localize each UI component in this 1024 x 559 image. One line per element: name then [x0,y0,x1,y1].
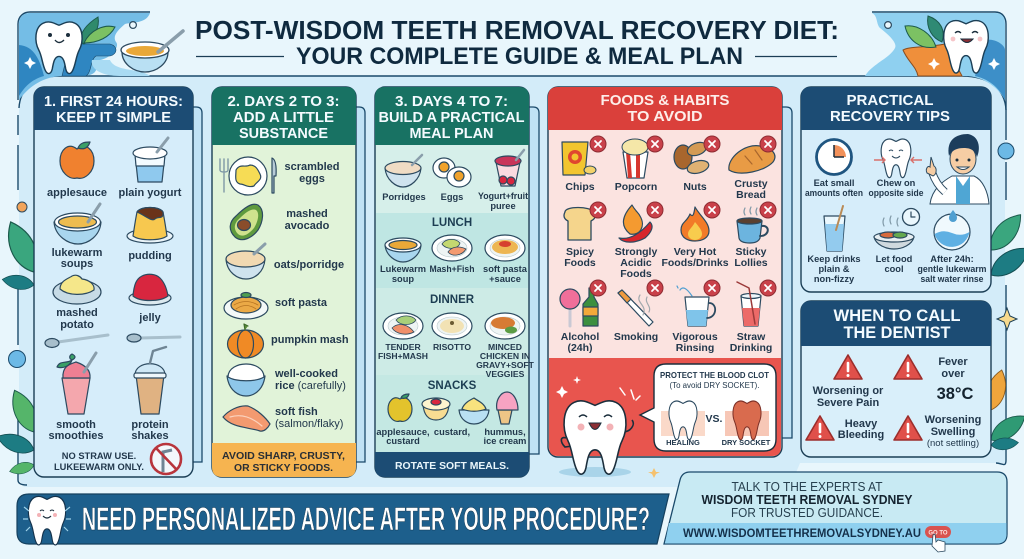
icon: minced chicken [485,313,525,339]
icon: jelly [129,274,171,305]
icon: banner tooth [23,496,71,545]
label: chew on: Chew on [877,178,916,188]
panel 1: first 24 hours [34,87,193,477]
temperature value: 38°C [937,385,974,403]
icon: pasta with sauce [485,235,525,261]
icon: plain yogurt [133,138,168,182]
icon: hot mug [737,202,776,243]
label: porridges: Porridges [382,192,426,202]
label: non-fizzy: non-fizzy [814,274,855,284]
dinner band [376,288,528,375]
label: bleeding: Bleeding [838,429,884,441]
label: soft pasta: soft pasta [483,264,528,274]
top left decoration [19,13,183,100]
icon: mash and fish [432,235,472,261]
label: spicy foods: Spicy [566,246,594,258]
label: not settling: (not settling) [927,438,979,449]
icon: lukewarm soup [385,238,421,262]
label: lollies: Lollies [734,257,768,269]
label: fish+mash: FISH+MASH [378,351,428,361]
panel 3: days 4 to 7 [375,87,535,477]
icon: crusty bread [729,136,776,173]
label: crusty: Crusty [734,178,768,190]
panel 4 header: TO AVOID [628,108,703,125]
label: let food: Let food [876,254,913,264]
icon: yogurt fruit [495,150,524,186]
left side leaves [0,202,45,477]
panel 6 header [801,301,991,346]
label: protein shakes: protein [131,419,169,431]
contact text line 2: WISDOM TEETH REMOVAL SYDNEY [702,493,913,507]
mascot tooth [556,376,660,478]
panel 5: practical recovery tips [801,87,991,292]
label: nuts: Nuts [683,181,707,193]
panel 2 footer: OR STICKY FOODS. [234,462,333,474]
icon: glass of water [824,206,845,251]
icon: hummus bowl [459,398,489,424]
icon: protein shake [134,347,166,414]
label: heavy: Heavy [845,418,878,430]
label: rice carefully: rice (carefully) [275,380,346,392]
label: potato: potato [60,319,94,331]
icon: lollipop and bottle [560,280,606,326]
panel 4 header: FOODS & HABITS [600,92,730,109]
panel 3 header: MEAL PLAN [410,125,494,142]
icon: salmon [223,406,270,431]
icon: cigarette [618,280,663,326]
label: lukewarm soups: lukewarm [52,247,103,259]
heading: lunch: LUNCH [432,217,472,229]
label: salmon flaky: (salmon/flaky) [275,418,343,430]
icon: warning pain [834,355,862,379]
heading: dinner: DINNER [430,294,475,306]
label: over: over [941,368,965,380]
icon: pumpkin [228,324,264,358]
panel 5 header [801,87,991,130]
icon: tender fish mash [383,313,423,339]
label: foods: Foods [620,268,652,280]
icon: popcorn [622,136,663,178]
icon: toast [564,202,606,240]
label: cool: cool [884,264,904,274]
icon: avocado [230,204,263,240]
panel 3 footer: ROTATE SOFT MEALS. [395,460,509,472]
icon: risotto [432,313,472,339]
icon: oats bowl [226,244,265,279]
label: soup: soup [392,274,414,284]
icon: porridge [385,155,422,187]
label: avocado: avocado [285,220,330,232]
contact text line 3: FOR TRUSTED GUIDANCE. [731,506,883,520]
panel 6: when to call the dentist [801,301,991,457]
banner heading: NEED PERSONALIZED ADVICE AFTER YOUR PROCEDURE? [82,501,650,537]
icon: doctor [926,134,989,204]
label: worsening: Worsening [925,414,981,426]
label: applesauce: applesauce [47,187,107,199]
panel 1 header: KEEP IT SIMPLE [56,109,171,126]
label: dry socket: DRY SOCKET [722,438,771,447]
speech bubble: protect the blood clot: PROTECT THE BLOOD CLOT [660,370,770,380]
icon: chips [562,136,606,175]
heading: snacks: SNACKS [428,380,477,392]
label: pumpkin mash: pumpkin mash [271,334,349,346]
label: fever: Fever [938,356,968,368]
label: vigorous: Vigorous [672,331,718,343]
label: pudding: pudding [128,250,172,262]
title: POST-WISDOM TEETH REMOVAL RECOVERY DIET: [195,15,839,45]
label: smooth smoothies: smooth [56,419,96,431]
lunch band [376,213,528,288]
icon: apple [388,394,412,421]
label: shakes: shakes [131,430,169,442]
icon: spoons [45,334,180,348]
label: eggs: eggs [299,173,325,185]
label: healing: HEALING [666,438,700,447]
panel 2 header: SUBSTANCE [239,125,328,142]
panel 1 header: 1. FIRST 24 HOURS: [44,93,183,110]
title [195,15,839,70]
label: veggies: VEGGIES [486,369,525,379]
panel 2 header: 2. DAYS 2 TO 3: [228,93,340,110]
label: rinsing: Rinsing [676,342,714,354]
panel 1 header [34,87,193,130]
panel 5 header: PRACTICAL [846,92,934,109]
icon: scrambled eggs [220,157,276,195]
icon: smoothie [57,353,96,414]
website address: WWW.WISDOMTEETHREMOVALSYDNEY.AU [683,526,921,540]
panel 2 footer: AVOID SHARP, CRUSTY, [222,450,345,462]
contact card [664,472,1007,552]
label: soft fish: soft fish [275,406,318,418]
label: keep drinks: Keep drinks [807,254,861,264]
panel 3 header: 3. DAYS 4 TO 7: [395,93,508,110]
icon: dry socket [725,401,769,440]
icon: soft pasta [224,292,268,319]
label: +sauce: +sauce [489,274,521,284]
icon: vigorous rinsing glass [677,280,720,326]
icon: nuts [674,136,720,176]
label: amounts often: amounts often [805,188,863,198]
label: smoothies: smoothies [48,430,104,442]
label: straw: Straw [737,331,766,343]
label: very hot: Very Hot [674,246,717,258]
label: acidic: Acidic [620,257,652,269]
panel 3 footer [375,452,529,477]
panel 2 footer [212,443,356,477]
label: severe pain: Severe Pain [817,397,879,409]
label: ice cream: ice cream [484,436,526,446]
icon: custard cup [422,398,450,420]
icon: eggs [433,158,471,187]
go to button [925,526,951,552]
label: gravy+soft: GRAVY+SOFT [476,360,535,370]
label: lukewarm soup: Lukewarm [380,264,426,274]
panel 4 header [548,87,782,130]
label: oats/porridge: oats/porridge [274,259,344,271]
label: swelling: Swelling [931,426,975,438]
label: smoking: Smoking [614,331,658,343]
label: strongly: Strongly [615,246,657,258]
label: foods/drinks: Foods/Drinks [661,257,729,269]
panel 2 header [212,87,356,145]
icon: warning bleeding [806,416,834,440]
label: yogurt+fruit: Yogurt+fruit [478,191,528,201]
panel 3 header [375,87,529,145]
panel 2 header: ADD A LITTLE [233,109,334,126]
label: applesauce: applesauce, [376,427,430,437]
label: plain: plain & [818,264,850,274]
icon: chew on opposite side [874,139,922,178]
panel 6 header: THE DENTIST [844,323,951,342]
label: (24h): (24h) [567,342,593,354]
icon: mashed potato [53,275,101,304]
contact text line 1: TALK TO THE EXPERTS AT [732,480,883,494]
label: foods: Foods [564,257,596,269]
label: eat small: Eat small [814,178,854,188]
icon: warning swelling [894,416,922,440]
label: well-cooked: well-cooked [274,368,338,380]
panel 3 header: BUILD A PRACTICAL [378,109,524,126]
go to button: GO TO [928,530,948,536]
panel 5 header: RECOVERY TIPS [830,108,950,125]
bottom banner [17,494,669,545]
label: minced: MINCED [488,342,522,352]
label: salt water rinse: salt water rinse [920,274,984,284]
panel 2: days 2 to 3 [212,87,356,477]
icon: flame [681,202,720,241]
label: hummus: hummus, [484,427,526,437]
label: puree: puree [490,201,516,211]
label: popcorn: Popcorn [615,181,657,193]
lower callout band [549,358,781,456]
icon: apple [60,142,94,178]
icon: clock [816,140,852,174]
label: gentle lukewarm: gentle lukewarm [918,264,986,274]
label: custard: custard [386,436,420,446]
label: mashed avocado: mashed [286,208,328,220]
icon: healing socket [661,401,705,440]
label: opposite side: opposite side [868,188,924,198]
label: eggs: Eggs [441,192,463,202]
label: tender fish+mash: TENDER [385,342,421,352]
label: sticky: Sticky [736,246,767,258]
icon: chili [619,202,663,242]
icon: lukewarm soup [54,204,101,244]
title: YOUR COMPLETE GUIDE & MEAL PLAN [296,43,743,70]
top right decoration [865,13,1005,100]
note: lukewarm only: LUKEEWARM ONLY. [54,462,144,472]
icon: warning fever [894,355,922,379]
icon: straw drink [737,280,776,326]
label: custard: custard, [434,427,470,437]
label: mashed potato: mashed [56,307,98,319]
snacks band [376,375,528,452]
icon: food cooling [874,208,920,249]
label: bread: Bread [736,189,766,201]
label: mash+fish: Mash+Fish [430,264,475,274]
speech bubble: protect the blood clot: (To avoid DRY SOCKET). [670,381,760,390]
label: plain yogurt: plain yogurt [119,187,182,199]
speech bubble: protect the blood clot [640,364,776,451]
icon: pudding [127,208,173,243]
label: scrambled eggs: scrambled [284,161,340,173]
label: after 24h: After 24h: [930,254,974,264]
label: jelly: jelly [138,312,162,324]
label: vs: VS. [706,413,723,425]
content backdrop [19,76,1005,487]
icon: salt water rinse [934,210,970,250]
label: drinking: Drinking [730,342,772,354]
label: chicken in: CHICKEN IN [480,351,530,361]
right side leaves [983,143,1024,451]
icon: ice cream [497,392,518,424]
panel 6 header: WHEN TO CALL [834,306,960,325]
label: risotto: RISOTTO [433,342,471,352]
icon: no straw [151,444,181,474]
panel 4: foods and habits to avoid [548,87,782,457]
label: alcohol: Alcohol [561,331,599,343]
note: no straw: NO STRAW USE. [62,451,136,461]
label: chips: Chips [565,181,595,193]
icon: rice bowl [227,364,265,396]
label: worsening or: Worsening or [813,385,884,397]
label: soft pasta: soft pasta [275,297,328,309]
back sheets of columns [185,107,792,462]
label: soups: soups [61,258,93,270]
